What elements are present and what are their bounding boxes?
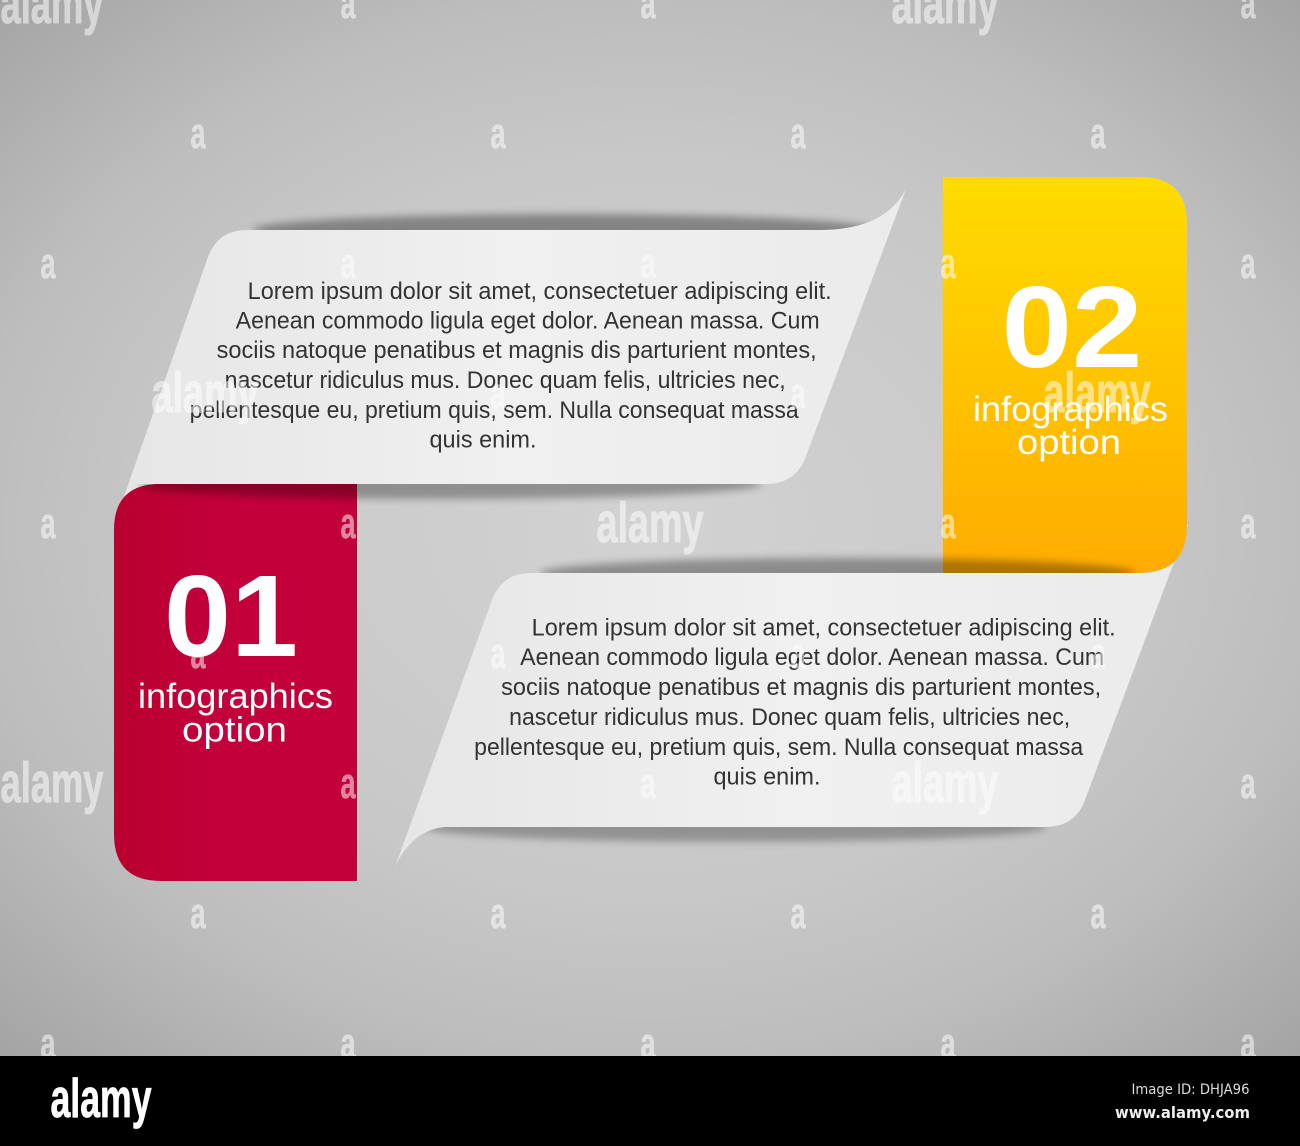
watermarks: a — [490, 369, 506, 418]
panel: option 01 tab — [114, 484, 357, 881]
text block: top: Lorem ipsum dolor sit amet, consectetuer adipiscing elit. — [248, 278, 832, 305]
text block: bottom: nascetur ridiculus mus. Donec quam felis, ultricies nec, — [509, 704, 1070, 731]
text block: top: nascetur ridiculus mus. Donec quam felis, ultricies nec, — [225, 367, 786, 394]
watermarks: a — [790, 109, 806, 158]
watermarks: a — [40, 1019, 56, 1068]
watermarks: a — [640, 239, 656, 288]
footer bar — [0, 1056, 1300, 1146]
text block: bottom: quis enim. — [714, 764, 820, 790]
text block: bottom: Lorem ipsum dolor sit amet, consectetuer adipiscing elit. — [532, 614, 1116, 642]
shadow: top ribbon upper — [253, 214, 877, 246]
label: infographics option 2: option — [1017, 423, 1121, 462]
shadow: bottom ribbon lower — [423, 812, 1047, 842]
shadow: top ribbon lower, over red tab — [136, 484, 763, 504]
watermarks: a — [340, 499, 356, 548]
watermarks: a — [1090, 629, 1106, 678]
watermarks: a — [340, 759, 356, 808]
text block: top: Aenean commodo ligula eget dolor. Aenean massa. Cum — [236, 308, 820, 334]
watermarks: a — [490, 109, 506, 158]
image id: Image ID: DHJA96 — [1132, 1082, 1250, 1098]
watermarks: a — [340, 1019, 356, 1068]
number 02: 02 — [1002, 262, 1142, 392]
watermarks: alamy — [152, 361, 259, 425]
footer logo: alamy — [50, 1067, 152, 1129]
watermarks: a — [1240, 239, 1256, 288]
watermarks: alamy — [1044, 361, 1151, 425]
watermarks: a — [1090, 889, 1106, 938]
watermarks: a — [340, 239, 356, 288]
label: infographics option 1: option — [182, 710, 287, 750]
watermarks: a — [490, 629, 506, 678]
watermarks: a — [940, 239, 956, 288]
panel: bottom ribbon — [395, 525, 1188, 867]
text block: top: quis enim. — [430, 426, 536, 454]
watermarks: a — [790, 889, 806, 938]
shadow: bottom ribbon upper, over yellow tab — [538, 554, 1138, 573]
watermarks: alamy — [0, 751, 104, 815]
label: infographics option 1: infographics — [138, 677, 333, 716]
watermarks: alamy — [596, 491, 704, 555]
watermarks: a — [40, 239, 56, 288]
watermarks: a — [1240, 499, 1256, 548]
number 01: 01 — [164, 551, 298, 681]
watermarks: a — [190, 889, 206, 938]
watermarks: a — [190, 629, 206, 678]
watermarks: a — [190, 109, 206, 158]
watermarks: a — [490, 889, 506, 938]
label: infographics option 2: infographics — [973, 390, 1168, 429]
watermarks: a — [1090, 109, 1106, 158]
watermarks: a — [640, 759, 656, 808]
text block: top: sociis natoque penatibus et magnis dis parturient montes, — [217, 337, 817, 364]
watermarks: a — [940, 499, 956, 548]
watermarks: a — [1240, 759, 1256, 808]
watermarks: a — [940, 1019, 956, 1068]
website: www.alamy.com — [1115, 1103, 1250, 1122]
watermarks: a — [1240, 1019, 1256, 1068]
text block: top: pellentesque eu, pretium quis, sem. Nulla consequat massa — [190, 397, 799, 424]
text block: bottom: sociis natoque penatibus et magnis dis parturient montes, — [501, 674, 1101, 701]
text block: bottom: pellentesque eu, pretium quis, sem. Nulla consequat massa — [474, 734, 1084, 761]
watermarks: a — [640, 1019, 656, 1068]
watermarks: a — [40, 499, 56, 548]
watermarks: a — [790, 369, 806, 418]
watermarks: alamy — [892, 751, 999, 815]
text block: bottom: Aenean commodo ligula eget dolor. Aenean massa. Cum — [520, 644, 1104, 671]
panel: option 02 tab — [943, 177, 1187, 573]
watermarks: a — [790, 629, 806, 678]
panel: top ribbon — [121, 189, 906, 510]
